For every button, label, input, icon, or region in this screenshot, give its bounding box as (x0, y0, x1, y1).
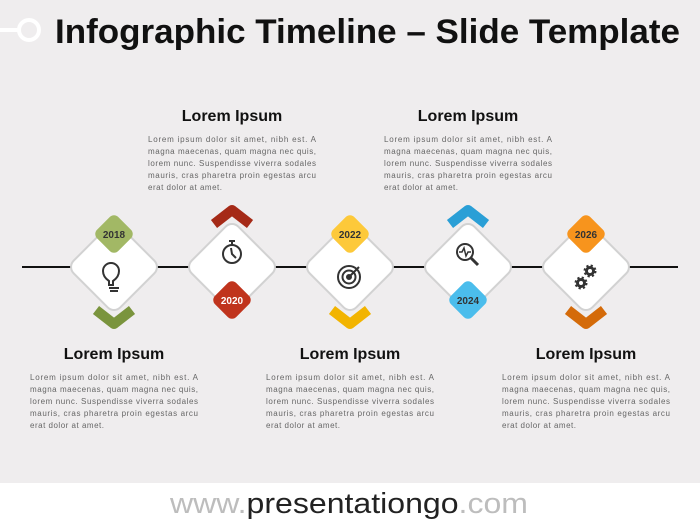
logo icon (0, 20, 39, 40)
timeline line (22, 266, 678, 268)
text block: bottom 3: erat dolor at amet. (502, 421, 576, 430)
icon: light bulb (103, 263, 119, 291)
milestone 2018: 2018 (103, 230, 126, 241)
text block: top 2: erat dolor at amet. (384, 183, 458, 192)
text block: top 1: lorem nunc. Suspendisse viverra sodales (148, 159, 316, 168)
text block: top 1: erat dolor at amet. (148, 183, 222, 192)
text block: bottom 2: magna maecenas, quam magna nec quis, (266, 385, 434, 394)
icon: stopwatch (223, 241, 241, 263)
text block: bottom 1: mauris, cras pharetra proin egestas arcu (30, 409, 198, 418)
text block: bottom 1: erat dolor at amet. (30, 421, 104, 430)
title: Infographic Timeline – Slide Template (55, 13, 680, 51)
text block: top 2: mauris, cras pharetra proin egestas arcu (384, 171, 552, 180)
chevron: orange (568, 310, 604, 324)
text block: bottom 2: lorem nunc. Suspendisse viverra sodales (266, 397, 434, 406)
icon: target (338, 266, 360, 288)
text block: bottom 3: Lorem ipsum dolor sit amet, nibh est. A (502, 373, 671, 382)
chevron: green (96, 310, 132, 324)
milestone 2020: 2020 (221, 296, 244, 307)
text block: bottom 3: lorem nunc. Suspendisse viverra sodales (502, 397, 670, 406)
text block: bottom 1: Lorem Ipsum (64, 346, 164, 363)
milestone 2022: 2022 (339, 230, 362, 241)
chevron: blue (450, 210, 486, 224)
footer band: www. presentationgo .com (169, 488, 528, 520)
text block: top 2: lorem nunc. Suspendisse viverra sodales (384, 159, 552, 168)
text block: bottom 3: magna maecenas, quam magna nec quis, (502, 385, 670, 394)
milestone 2024 (421, 220, 515, 321)
footer band (0, 483, 700, 525)
text block: top 1: magna maecenas, quam magna nec quis, (148, 147, 316, 156)
text block: bottom 1: Lorem ipsum dolor sit amet, nibh est. A (30, 373, 199, 382)
text block: bottom 1: magna maecenas, quam magna nec quis, (30, 385, 198, 394)
milestone 2026: 2026 (575, 230, 598, 241)
milestone 2020 (185, 220, 279, 321)
text block: top 2: magna maecenas, quam magna nec quis, (384, 147, 552, 156)
text block: bottom 2: mauris, cras pharetra proin egestas arcu (266, 409, 434, 418)
text block: bottom 1: lorem nunc. Suspendisse viverra sodales (30, 397, 198, 406)
text block: top 2: Lorem Ipsum (418, 108, 518, 125)
chevron: red (214, 210, 250, 224)
milestone 2018 (67, 213, 161, 314)
text block: bottom 2 (266, 346, 435, 430)
text block: bottom 2: Lorem Ipsum (300, 346, 400, 363)
chevron: yellow (332, 310, 368, 324)
text block: bottom 2: erat dolor at amet. (266, 421, 340, 430)
milestone 2026 (539, 213, 633, 314)
text block: bottom 2: Lorem ipsum dolor sit amet, nibh est. A (266, 373, 435, 382)
text block: top 1: Lorem ipsum dolor sit amet, nibh est. A (148, 135, 317, 144)
text block: top 2 (384, 108, 553, 192)
milestone 2022 (303, 213, 397, 314)
text block: top 1 (148, 108, 317, 192)
icon: magnifier (457, 244, 478, 265)
text block: top 1: mauris, cras pharetra proin egestas arcu (148, 171, 316, 180)
icon: gears (576, 266, 595, 288)
text block: top 1: Lorem Ipsum (182, 108, 282, 125)
text block: bottom 1 (30, 346, 199, 430)
text block: bottom 3: mauris, cras pharetra proin egestas arcu (502, 409, 670, 418)
text block: top 2: Lorem ipsum dolor sit amet, nibh est. A (384, 135, 553, 144)
text block: bottom 3 (502, 346, 671, 430)
text block: bottom 3: Lorem Ipsum (536, 346, 636, 363)
milestone 2024: 2024 (457, 296, 480, 307)
